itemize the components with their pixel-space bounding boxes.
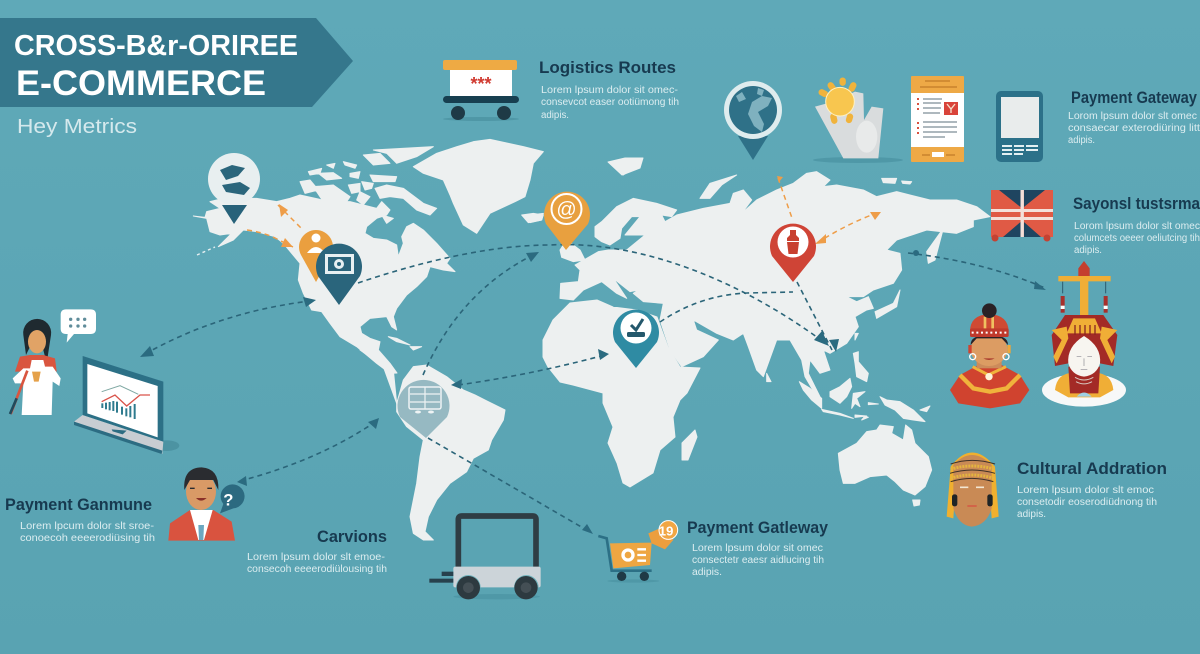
pin: orange at sign (544, 192, 590, 250)
figure: woman with speech bubble (10, 309, 96, 415)
title banner (0, 18, 353, 107)
icon: laptop with chart (74, 356, 179, 454)
figure: man with question bubble: ? (223, 491, 233, 510)
text block: cultural adaptation: Cultural Addration (1017, 459, 1167, 478)
text block: logistics routes: Logistics Routes (539, 58, 676, 77)
text block: payment gateway bottom (687, 518, 828, 578)
text block: carvions (247, 527, 387, 575)
icon: shopping cart with tag (598, 521, 678, 583)
text block: logistics routes: consevcot easer ootiümong tih (541, 97, 679, 108)
icon: phone (996, 91, 1043, 162)
icon: hand and sun (813, 81, 903, 163)
pin: orange user (299, 230, 333, 282)
text block: cultural adaptation (1017, 459, 1167, 520)
text block: payment left: conoecoh eeeerodiüsing tih (20, 533, 155, 544)
dashed routes (145, 245, 1045, 532)
icon: globe pin (724, 81, 782, 160)
text block: payment left: Lorem lpcum dolor slt sroe- (20, 521, 154, 532)
pin: red bottle (770, 224, 816, 282)
icon: flag (991, 190, 1053, 242)
icon: shopping cart with tag: 19 (659, 523, 673, 538)
pin: dark money (316, 244, 362, 305)
text block: cultural adaptation: Lorem lpsum dolor slt emoc (1017, 485, 1154, 496)
text block: payment gateway bottom: Payment Gatleway (687, 518, 828, 537)
text block: payment gateway top: Lorom lpsum dolor slt omec (1068, 111, 1197, 122)
pin: white globe (208, 153, 260, 224)
text block: cultural adaptation: adipis. (1017, 509, 1046, 520)
subtitle: Hey Metrics (17, 116, 137, 138)
title banner: E-COMMERCE (16, 64, 266, 103)
Eurasia (530, 170, 990, 397)
text block: logistics routes: Lorem lpsum dolor sit omec- (541, 85, 678, 96)
text block: payment left: Payment Ganmune (5, 495, 152, 514)
text block: payment gateway bottom: consectetr eaesr aidlucing tih (692, 555, 824, 566)
pin: teal check (613, 310, 659, 368)
text block: cultural adaptation: consetodir eoserodiüdnong tih (1017, 497, 1157, 508)
text block: payment gateway bottom: Lorem lpsum dolor sit omec (692, 543, 823, 554)
icon: forklift cart (429, 516, 541, 599)
Svalbard (608, 158, 643, 175)
South America (360, 343, 505, 540)
text block: payment gateway top: consaecar exterodiüring litt (1068, 123, 1200, 134)
Africa (543, 300, 700, 487)
figure: cultural mask face (947, 452, 999, 527)
text block: payment left (5, 495, 155, 544)
pin: pale screen (398, 380, 450, 438)
text block: payment gateway top (1068, 88, 1200, 146)
Southeast Asia and Australia (767, 352, 932, 506)
icon: document (911, 76, 964, 162)
title banner: CROSS-B&r-ORIREE (14, 30, 298, 62)
text block: payment gateway top: adipis. (1068, 135, 1095, 146)
figure: man with question bubble (168, 467, 245, 541)
text block: logistics routes (539, 58, 679, 121)
figure: woman in red headdress (950, 303, 1029, 408)
figure: ornate idol (1042, 261, 1126, 407)
world map (193, 139, 990, 540)
text block: payment gateway bottom: adipis. (692, 567, 722, 578)
text block: carvions: consecoh eeeerodiülousing tih (247, 564, 387, 575)
icon: truck top: *** (470, 74, 492, 94)
text block: seasonal customs: adipis. (1074, 245, 1102, 256)
orange routes (247, 178, 880, 247)
pin: orange at sign: @ (556, 199, 577, 221)
text block: seasonal customs (1073, 194, 1200, 256)
arrowheads: dark (140, 250, 1046, 534)
text block: carvions: Lorem lpsum dolor slt emoe- (247, 552, 385, 563)
text block: seasonal customs: Lorom lpsum dolor slt omec (1074, 221, 1200, 232)
text block: carvions: Carvions (317, 527, 387, 546)
icon: truck top (443, 60, 519, 121)
North America (193, 139, 543, 373)
text block: logistics routes: adipis. (541, 110, 569, 121)
